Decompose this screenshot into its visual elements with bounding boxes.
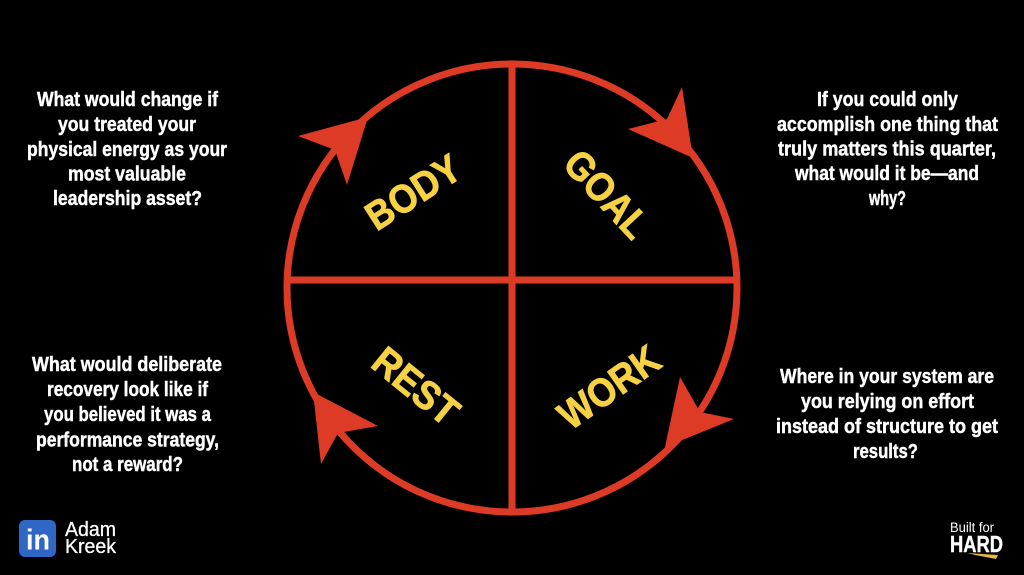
question: goal: truly matters this quarter, (778, 138, 996, 160)
wordmark: HARD (950, 531, 1003, 557)
question: work: results? (853, 441, 918, 463)
question: rest: you believed it was a (44, 404, 212, 426)
arrow: goal to work (628, 87, 693, 158)
circle ring (287, 64, 737, 512)
question: work: you relying on effort (801, 391, 974, 413)
question: body: physical energy as your (27, 139, 227, 161)
label: REST: REST (363, 339, 467, 435)
question: rest: performance strategy, (36, 430, 219, 452)
question: goal: why? (868, 188, 906, 210)
question: body: leadership asset? (53, 188, 202, 210)
cycle diagram (287, 64, 737, 512)
name: Adam (65, 519, 116, 541)
arrow: body to goal (298, 117, 368, 185)
arrow: work to rest (665, 377, 734, 447)
question: body: What would change if (37, 89, 218, 111)
swoosh (967, 553, 998, 559)
badge letters: in (26, 524, 50, 556)
question: body: you treated your (58, 114, 196, 136)
question: work: instead of structure to get (776, 416, 998, 438)
vertical divider (508, 64, 516, 512)
question: rest: What would deliberate (32, 354, 222, 376)
horizontal divider (287, 276, 737, 284)
question: goal: If you could only (817, 89, 959, 111)
question: rest: not a reward? (72, 454, 183, 476)
arrow: rest to body (313, 392, 378, 464)
question: goal: what would it be—and (794, 163, 979, 185)
tagline: Built for (950, 520, 994, 535)
label: WORK: WORK (550, 337, 669, 439)
logo: Built for HARD (950, 520, 1003, 559)
label: BODY: BODY (358, 146, 469, 239)
label: GOAL: GOAL (555, 142, 658, 248)
question: body: most valuable (68, 164, 186, 186)
question: work: Where in your system are (780, 366, 994, 388)
icon: LinkedIn badge (19, 520, 56, 557)
question: rest: recovery look like if (47, 379, 208, 401)
name: Kreek (65, 536, 117, 558)
logo: LinkedIn Adam Kreek (19, 519, 122, 558)
question: goal: accomplish one thing that (777, 114, 998, 136)
